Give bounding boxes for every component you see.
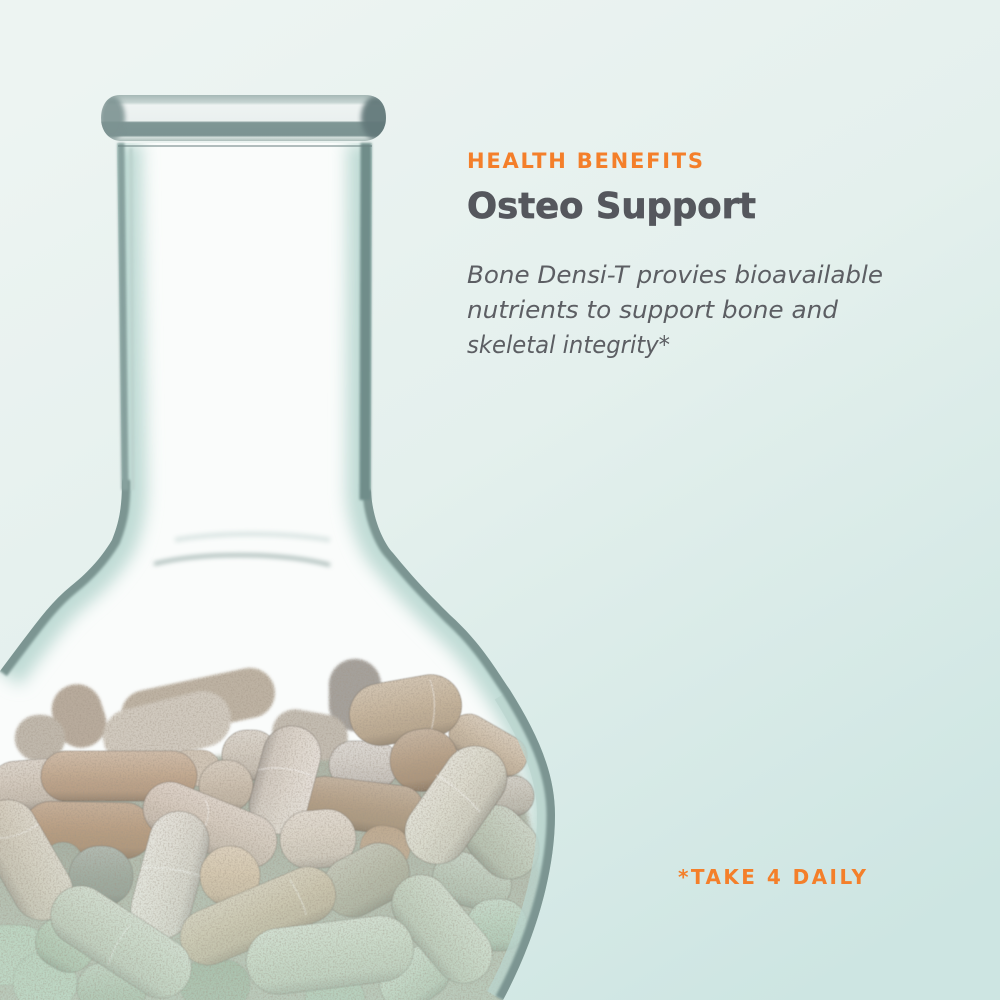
- back row capsules: [15, 659, 381, 771]
- description: Bone Densi-T provies bioavailable: [467, 261, 883, 289]
- title: osteo support: Osteo Support: [467, 186, 756, 227]
- left neck wall: [121, 143, 125, 490]
- shoulder ring smudge: [154, 555, 330, 565]
- right neck wall: [365, 143, 366, 500]
- glass flask with capsules: [0, 95, 570, 1000]
- capsule pile: [0, 659, 570, 1000]
- dosage note: *TAKE 4 DAILY: [678, 865, 867, 889]
- rim end left: [99, 96, 125, 140]
- glass wall band lower right: [503, 690, 555, 1000]
- left neck inner edge: [131, 148, 133, 490]
- rim end right: [361, 96, 391, 140]
- front capsules: [50, 867, 492, 1000]
- shoulder ring faint band: [175, 534, 330, 540]
- flask rim: [99, 95, 391, 141]
- heading block: [467, 149, 883, 359]
- description: nutrients to support bone and: [467, 296, 839, 324]
- description: skeletal integrity*: [467, 331, 670, 359]
- inner glass glow: [0, 143, 546, 866]
- eyebrow: health benefits: HEALTH BENEFITS: [467, 149, 703, 173]
- glass wall shoulders: [0, 480, 555, 1000]
- neck top seam: [118, 145, 372, 147]
- pile shadow fill: [0, 740, 570, 1000]
- flask interior: [0, 143, 555, 1000]
- green tint over capsules: [0, 824, 532, 1000]
- middle capsules: [0, 670, 551, 1000]
- description: [467, 261, 883, 359]
